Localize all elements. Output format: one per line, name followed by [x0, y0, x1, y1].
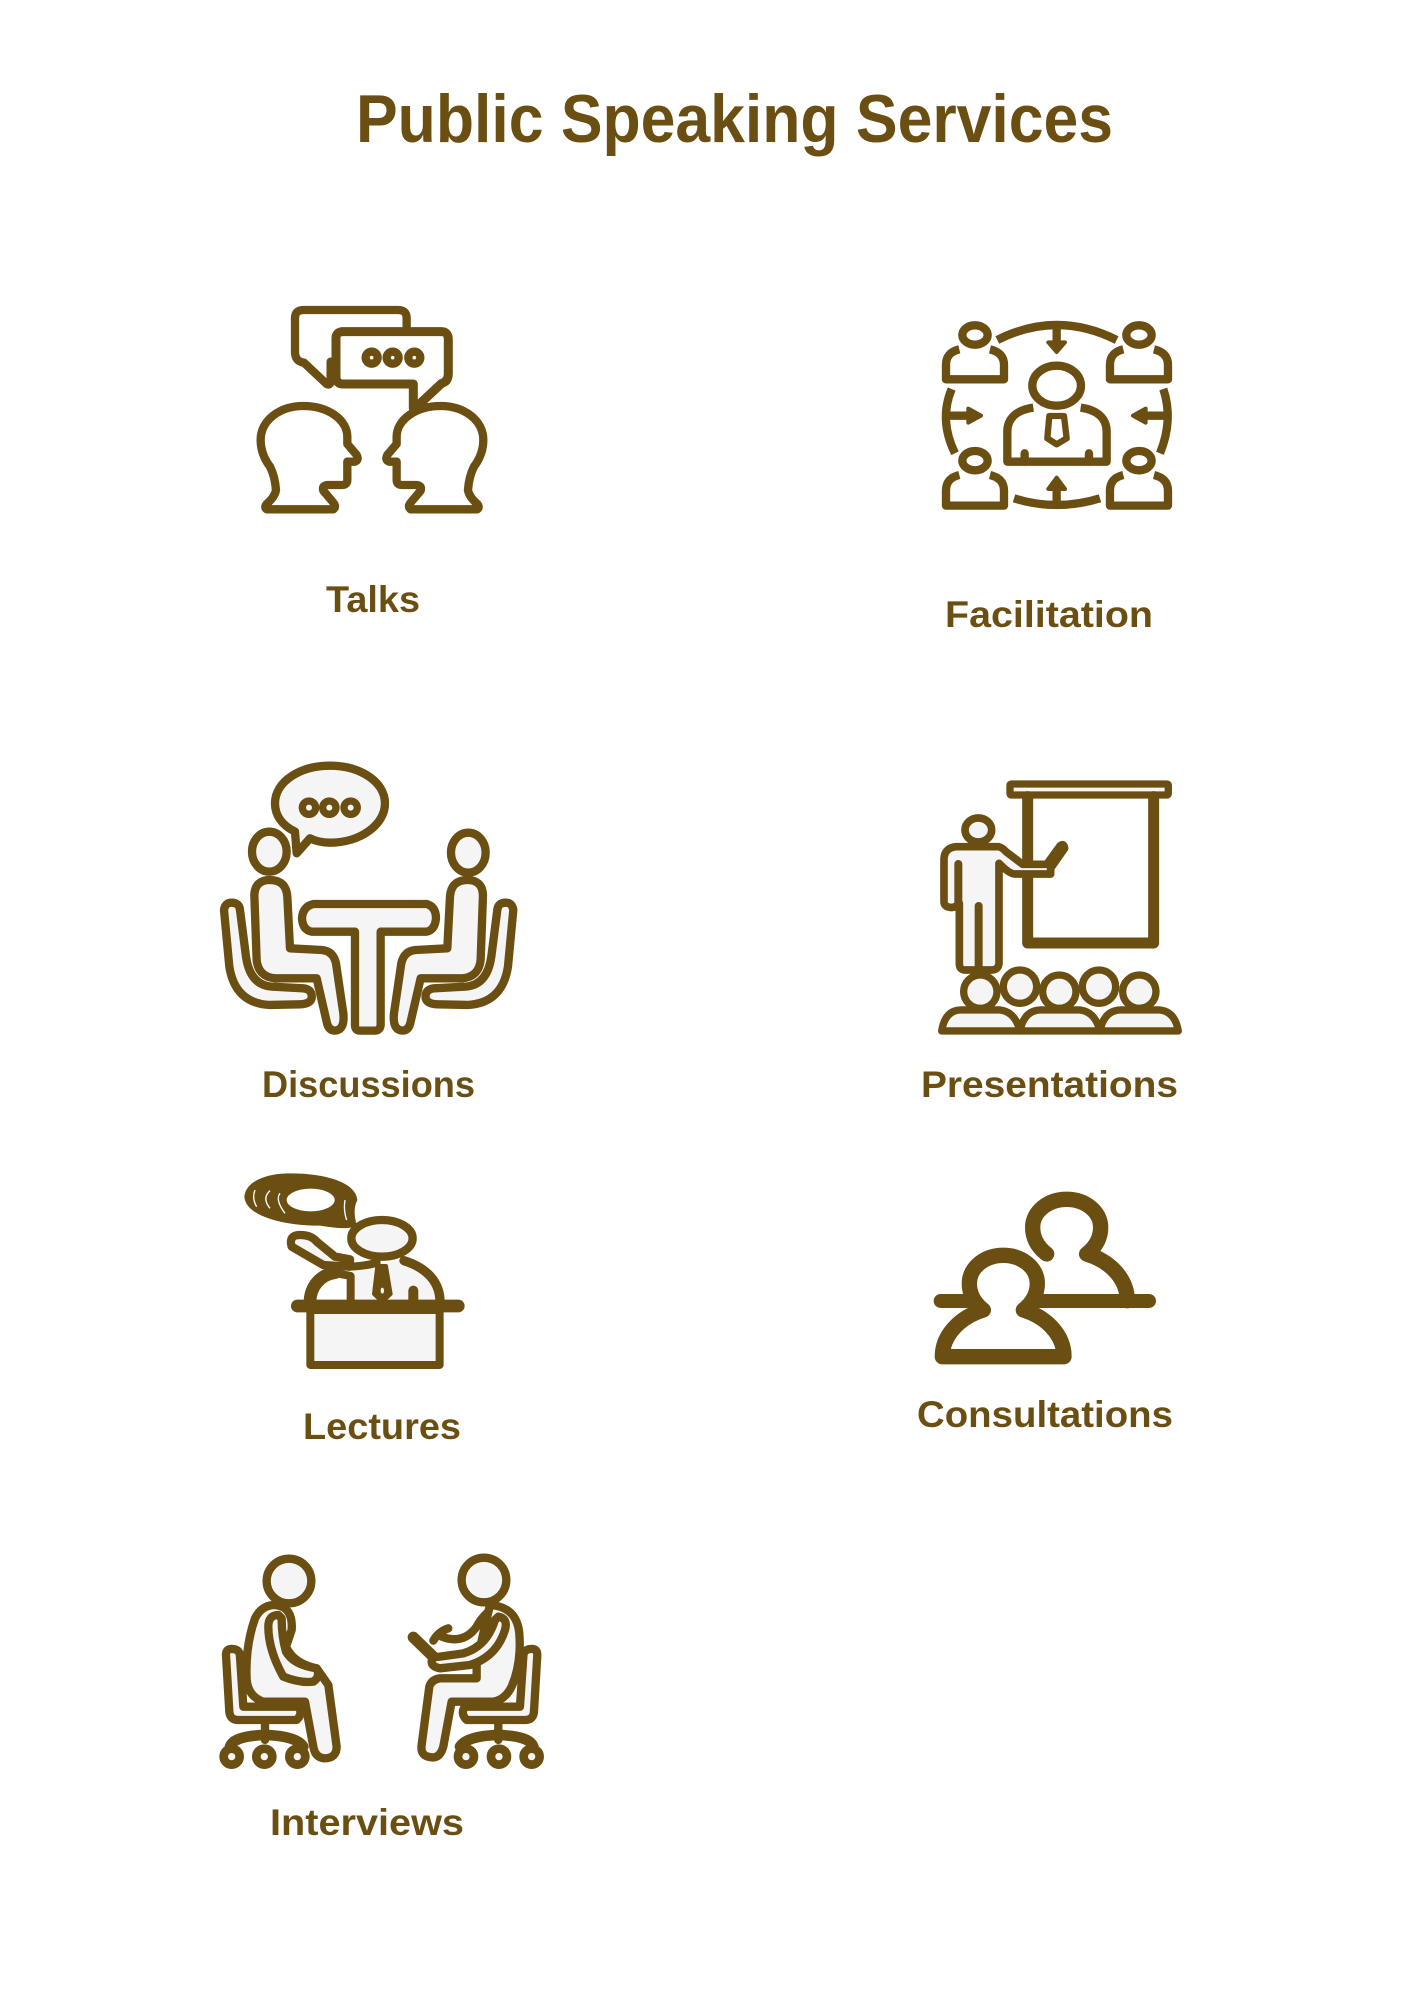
- icon: discussions: [224, 766, 513, 1031]
- icon: consultations: [941, 1199, 1149, 1357]
- icon: facilitation: [946, 325, 1168, 506]
- icon: presentations: [942, 784, 1178, 1031]
- icon: talks: [261, 310, 483, 509]
- label: discussions: Discussions: [262, 1064, 475, 1105]
- label: presentations: Presentations: [921, 1064, 1178, 1105]
- label: facilitation: Facilitation: [945, 594, 1153, 635]
- label: interviews: Interviews: [270, 1802, 464, 1843]
- label: talks: Talks: [326, 579, 420, 620]
- label: lectures: Lectures: [303, 1406, 461, 1447]
- label: consultations: Consultations: [917, 1394, 1173, 1435]
- title: Public Speaking Services: [356, 81, 1113, 157]
- icon: lectures: [245, 1174, 458, 1365]
- icon: interviews: [224, 1558, 540, 1765]
